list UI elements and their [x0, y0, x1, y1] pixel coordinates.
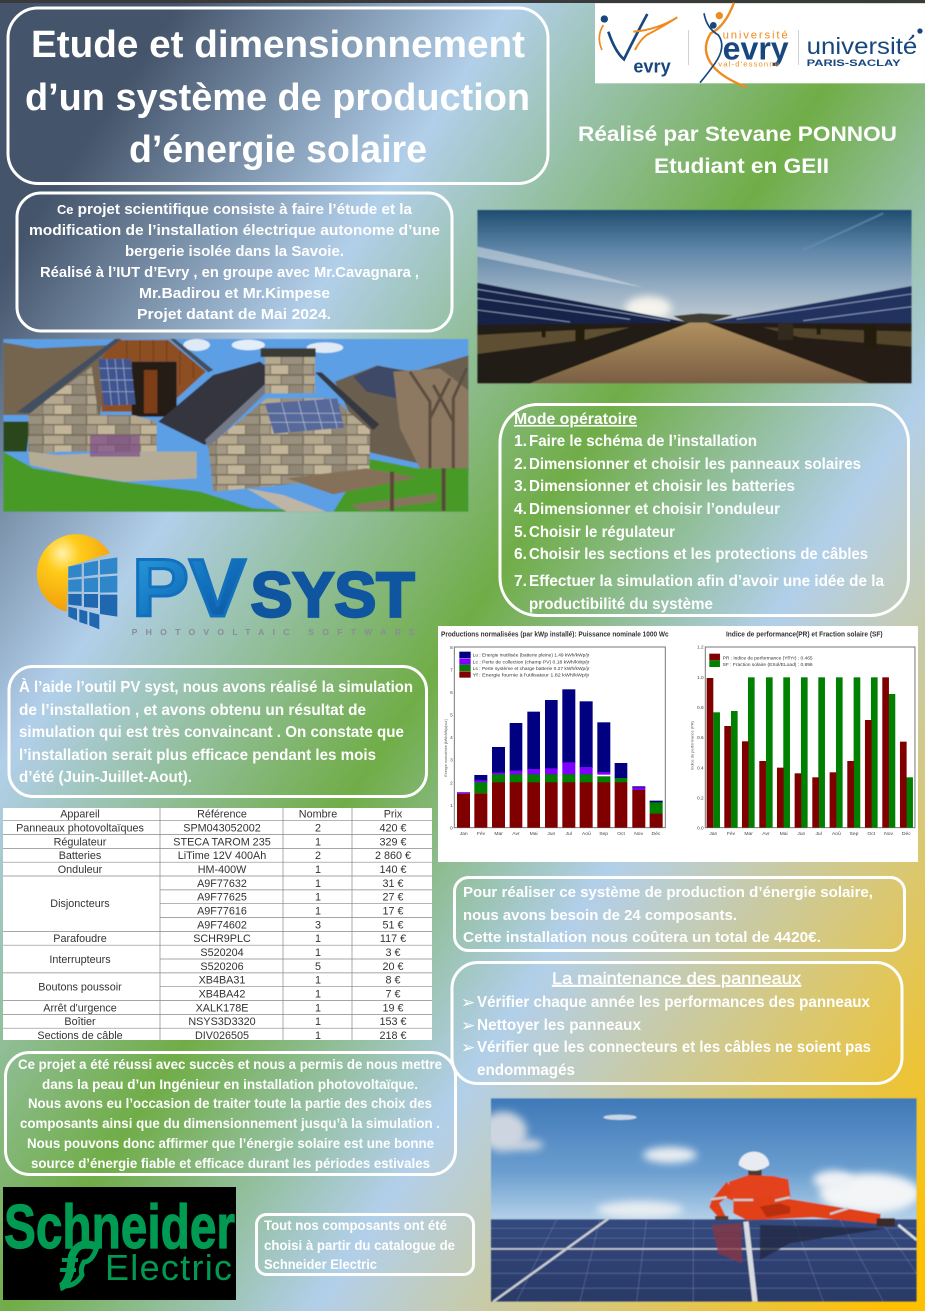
catalogue note box: choisi à partir du catalogue de	[264, 1238, 455, 1253]
components table: Boutons poussoir	[38, 982, 122, 994]
components table: 3 €	[385, 947, 401, 959]
components table: 420 €	[379, 822, 407, 834]
title box: Etude et dimensionnement	[31, 24, 525, 66]
components table: 1	[315, 1002, 321, 1014]
chart: normalised production: Aoû	[582, 831, 591, 837]
chart: performance ratio and solar fraction: Oct	[867, 831, 876, 837]
author	[578, 122, 897, 178]
catalogue note box: Tout nos composants ont été	[264, 1218, 447, 1233]
steps list: Choisir le régulateur	[529, 524, 675, 541]
simulation text box: l’installation serait plus efficace pendant les mois	[19, 747, 376, 764]
maintenance box	[452, 962, 902, 1084]
components table: Boîtier	[64, 1016, 96, 1028]
conclusion box: Nous pouvons donc affirmer que l’énergie solaire est une bonne	[27, 1136, 434, 1151]
conclusion box: source d’énergie fiable et efficace durant les périodes estivales	[31, 1156, 430, 1171]
components table: 1	[315, 906, 321, 918]
simulation text box: simulation qui est très convaincant . On constate que	[19, 724, 404, 741]
components table: SPM043052002	[183, 822, 261, 834]
steps list: 3.	[514, 478, 527, 495]
components table: Parafoudre	[53, 933, 107, 945]
steps list: 2.	[514, 456, 527, 473]
chart: normalised production: 6	[450, 690, 453, 695]
cost summary box: nous avons besoin de 24 composants.	[463, 907, 737, 924]
components table: 51 €	[382, 919, 404, 931]
intro box: Ce projet scientifique consiste à faire l’étude et la	[57, 202, 413, 218]
logo: université Paris-Saclay: université	[807, 33, 917, 59]
chart: performance ratio and solar fraction: Fév	[727, 831, 736, 837]
components table: DIV026505	[195, 1030, 249, 1042]
title box: d’énergie solaire	[129, 129, 427, 171]
chart: normalised production: Lu : Energie inutilisée (batterie pleine) 1.49 kWh/kWp/jr	[473, 653, 590, 658]
steps list: 7.	[514, 573, 527, 590]
simulation text box	[9, 666, 426, 796]
components table: 1	[315, 988, 321, 1000]
components table: Panneaux photovoltaïques	[16, 822, 145, 834]
wordmark: PV: PV	[132, 543, 246, 634]
chart: normalised production: Jan	[460, 831, 468, 837]
chart: performance ratio and solar fraction: PR : Indice de performance (Yf/Yr) : 0.465	[723, 656, 813, 661]
conclusion box: dans la peau d’un Ingénieur en installation photovoltaïque.	[42, 1077, 418, 1092]
bullet list: endommagés	[477, 1062, 575, 1079]
steps list: Dimensionner et choisir les panneaux solaires	[529, 456, 861, 473]
components table: 218 €	[379, 1030, 407, 1042]
chart: performance ratio and solar fraction: 0.4	[697, 765, 704, 770]
components table: Arrêt d'urgence	[43, 1002, 117, 1014]
chart: normalised production: 5	[450, 713, 453, 718]
components table: Disjoncteurs	[50, 898, 110, 910]
chart: normalised production: 1	[450, 803, 453, 808]
components table: 140 €	[379, 864, 407, 876]
components table: 3	[315, 919, 321, 931]
catalogue note box: Schneider Electric	[264, 1257, 377, 1272]
steps list: Faire le schéma de l’installation	[529, 433, 757, 450]
chart: performance ratio and solar fraction: 1.0	[697, 675, 704, 680]
chart: performance ratio and solar fraction: 0.6	[697, 735, 704, 740]
chart: performance ratio and solar fraction: Jun	[797, 831, 806, 837]
steps list: 5.	[514, 524, 527, 541]
icon: sun	[37, 534, 110, 612]
author: Etudiant en GEII	[654, 154, 829, 178]
chart: performance ratio and solar fraction: Déc	[902, 831, 911, 837]
components table: 1	[315, 1016, 321, 1028]
logo: université Paris-Saclay	[807, 28, 923, 68]
chart: normalised production: 4	[450, 735, 453, 740]
chart: performance ratio and solar fraction	[689, 629, 915, 837]
conclusion box: Nous avons eu l’occasion de traiter toute la partie des choix des	[28, 1096, 432, 1111]
photo: technician on solar panels	[480, 1098, 920, 1302]
components table: A9F77625	[197, 892, 247, 904]
steps list: 1.	[514, 433, 527, 450]
components table: A9F77616	[197, 906, 247, 918]
chart: normalised production: 7	[450, 667, 453, 672]
chart: normalised production: Déc	[652, 831, 661, 837]
components table: SCHR9PLC	[193, 933, 251, 945]
components table: 2 860 €	[375, 850, 411, 862]
Schneider Electric logo	[3, 1187, 236, 1300]
components table: 2	[315, 822, 321, 834]
title box: d’un système de production	[25, 77, 530, 119]
components table: 1	[315, 836, 321, 848]
components table: Régulateur	[54, 836, 107, 848]
heading: Mode opératoire	[514, 411, 637, 428]
cost summary box	[454, 878, 904, 950]
components table: 1	[315, 864, 321, 876]
chart: performance ratio and solar fraction: Jan	[709, 831, 718, 837]
components table: 2	[315, 850, 321, 862]
components table: 1	[315, 878, 321, 890]
components table: 17 €	[382, 906, 404, 918]
conclusion box: composants ainsi que du dimensionnement jusqu’à la simulation .	[20, 1116, 440, 1131]
icon: solar panel grid	[68, 557, 117, 629]
components table: NSYS3D3320	[188, 1016, 256, 1028]
steps list: Effectuer la simulation afin d’avoir une idée de la	[529, 573, 884, 590]
chart: performance ratio and solar fraction: Mar	[744, 831, 753, 837]
components table: Onduleur	[58, 864, 103, 876]
components table: 1	[315, 1030, 321, 1042]
intro box: bergerie isolée dans la Savoie.	[125, 244, 344, 260]
simulation text box: d’été (Juin-Juillet-Aout).	[19, 769, 192, 786]
photo: solar farm	[477, 210, 912, 383]
chart: normalised production: 2	[450, 780, 453, 785]
components table: STECA TAROM 235	[173, 836, 271, 848]
tagline: PHOTOVOLTAIC SOFTWARE	[132, 627, 415, 637]
Schneider Electric logo: Schneider	[4, 1193, 235, 1262]
components table: 117 €	[380, 933, 406, 945]
components table: HM-400W	[198, 864, 247, 876]
chart: normalised production: Jun	[547, 831, 556, 837]
simulation text box: À l’aide l’outil PV syst, nous avons réalisé la simulation	[19, 677, 413, 696]
intro box: Réalisé à l’IUT d’Evry , en groupe avec Mr.Cavagnara ,	[40, 265, 419, 281]
components table: 153 €	[379, 1016, 407, 1028]
logo: IUT Evry: evry	[633, 55, 671, 76]
chart: performance ratio and solar fraction: Jul	[815, 831, 822, 837]
components table: XALK178E	[196, 1002, 248, 1014]
components table: Appareil	[60, 809, 100, 821]
Schneider Electric logo: Electric	[105, 1247, 232, 1288]
chart: performance ratio and solar fraction: 0.2	[697, 795, 704, 800]
conclusion box: Ce projet a été réussi avec succès et nous a permis de nous mettre	[18, 1057, 442, 1072]
bullet list: ➢	[461, 993, 475, 1013]
wordmark: SYST: SYST	[251, 560, 415, 630]
bullet list: Nettoyer les panneaux	[477, 1017, 641, 1034]
components table: Interrupteurs	[49, 954, 111, 966]
chart: performance ratio and solar fraction: Indice de performance(PR) et Fraction solaire (SF)	[726, 629, 883, 638]
chart: normalised production: Avr	[512, 831, 520, 837]
logo: université Paris-Saclay: PARIS-SACLAY	[807, 58, 902, 68]
chart: normalised production: Mar	[494, 831, 503, 837]
steps list: productibilité du système	[529, 596, 713, 613]
components table: 19 €	[382, 1002, 404, 1014]
bullet list	[461, 993, 871, 1079]
steps list: 6.	[514, 546, 527, 563]
chart: performance ratio and solar fraction: 0.0	[697, 825, 704, 830]
components table: 7 €	[385, 988, 401, 1000]
components table: S520204	[200, 947, 244, 959]
cost summary box: Cette installation nous coûtera un total de 4420€.	[463, 929, 821, 946]
author: Réalisé par Stevane PONNOU	[578, 122, 897, 146]
chart: normalised production: 0	[450, 825, 453, 830]
components table: Batteries	[59, 850, 102, 862]
components table: 1	[315, 892, 321, 904]
components table: Nombre	[299, 809, 337, 821]
simulation text box: de l’installation , et avons obtenu un résultat de	[19, 702, 366, 719]
components table: 1	[315, 975, 321, 987]
bullet list: ➢	[461, 1016, 475, 1036]
logo: université Evry: evry	[723, 30, 789, 66]
components table: 1	[315, 947, 321, 959]
cost summary box: Pour réaliser ce système de production d’énergie solaire,	[463, 884, 873, 901]
chart: performance ratio and solar fraction: Indice de performance (PR)	[689, 720, 694, 770]
charts panel	[438, 626, 918, 862]
components table: XB4BA42	[199, 988, 245, 1000]
catalogue note box	[256, 1214, 474, 1274]
intro box: Projet datant de Mai 2024.	[137, 307, 331, 323]
logo: université Evry: université	[723, 29, 788, 41]
components table: 5	[315, 961, 321, 973]
steps list: Choisir les sections et les protections de câbles	[529, 546, 868, 563]
chart: normalised production: Lc : Perte de collection (champ PV) 0.18 kWh/kWp/jr	[473, 659, 590, 664]
components table: 8 €	[385, 975, 401, 987]
components table: Sections de câble	[37, 1030, 123, 1042]
components table: A9F74602	[197, 919, 247, 931]
steps list: Dimensionner et choisir l’onduleur	[529, 501, 780, 518]
chart: normalised production: Productions normalisées (par kWp installé): Puissance nominale 1000 Wc	[441, 629, 669, 638]
icon: Schneider S-plug	[60, 1244, 97, 1287]
chart: performance ratio and solar fraction: Nov	[884, 831, 894, 837]
steps list: Dimensionner et choisir les batteries	[529, 478, 795, 495]
chart: normalised production: Mai	[530, 831, 538, 837]
components table: A9F77632	[197, 878, 247, 890]
conclusion box	[6, 1052, 456, 1174]
chart: performance ratio and solar fraction: 1.2	[697, 645, 704, 650]
chart: normalised production: Energie normalisée [kWh/kWp/jour]	[444, 719, 448, 777]
components table: S520206	[200, 961, 244, 973]
title box	[8, 8, 548, 184]
chart: normalised production: 3	[450, 758, 453, 763]
components table: LiTime 12V 400Ah	[178, 850, 266, 862]
mode opératoire box	[500, 404, 908, 616]
chart: normalised production: Yf : Energie fournie à l'utilisateur 1.82 kWh/kWp/jr	[473, 673, 590, 678]
PVsyst logo	[37, 534, 415, 637]
intro box	[17, 193, 452, 331]
steps list	[514, 433, 884, 613]
chart: performance ratio and solar fraction: SF : Fraction solaire (ESol/ELoad) : 0.896	[723, 662, 813, 667]
chart: normalised production: Sep	[599, 831, 608, 837]
components table: 1	[315, 933, 321, 945]
chart: performance ratio and solar fraction: Sep	[850, 831, 859, 837]
logo: IUT Evry	[599, 14, 677, 76]
chart: normalised production: Ls : Perte système et charge batterie 0.27 kWh/kWp/jr	[473, 666, 590, 671]
chart: normalised production: 8	[450, 645, 453, 650]
photo: stone sheepfold with solar panels	[0, 335, 475, 520]
chart: performance ratio and solar fraction: Mai	[780, 831, 788, 837]
chart: normalised production	[441, 629, 669, 837]
chart: performance ratio and solar fraction: 0.8	[697, 705, 704, 710]
bullet list: Vérifier chaque année les performances des panneaux	[477, 994, 870, 1011]
components table: 27 €	[382, 892, 404, 904]
components table: Référence	[197, 809, 247, 821]
chart: performance ratio and solar fraction: Aoû	[832, 831, 841, 837]
chart: normalised production: Oct	[617, 831, 625, 837]
components table: 329 €	[379, 836, 407, 848]
chart: normalised production: Fév	[477, 831, 486, 837]
intro box: Mr.Badirou et Mr.Kimpese	[139, 286, 330, 302]
steps list: 4.	[514, 501, 527, 518]
chart: performance ratio and solar fraction: Avr	[762, 831, 770, 837]
components table: 20 €	[382, 961, 404, 973]
chart: normalised production: Nov	[634, 831, 644, 837]
components table	[3, 808, 432, 1042]
logo: université Evry: val-d'essonne	[718, 59, 779, 68]
logo: université Evry	[700, 3, 789, 87]
components table: XB4BA31	[199, 975, 245, 987]
components table: Prix	[384, 809, 403, 821]
bullet list: Vérifier que les connecteurs et les câbles ne soient pas	[477, 1039, 871, 1056]
components table: 31 €	[382, 878, 404, 890]
chart: normalised production: Jul	[565, 831, 572, 837]
intro box: modification de l’installation électrique autonome d’une	[29, 223, 440, 239]
logos	[595, 3, 925, 87]
bullet list: ➢	[461, 1038, 475, 1058]
heading: La maintenance des panneaux	[552, 970, 802, 988]
